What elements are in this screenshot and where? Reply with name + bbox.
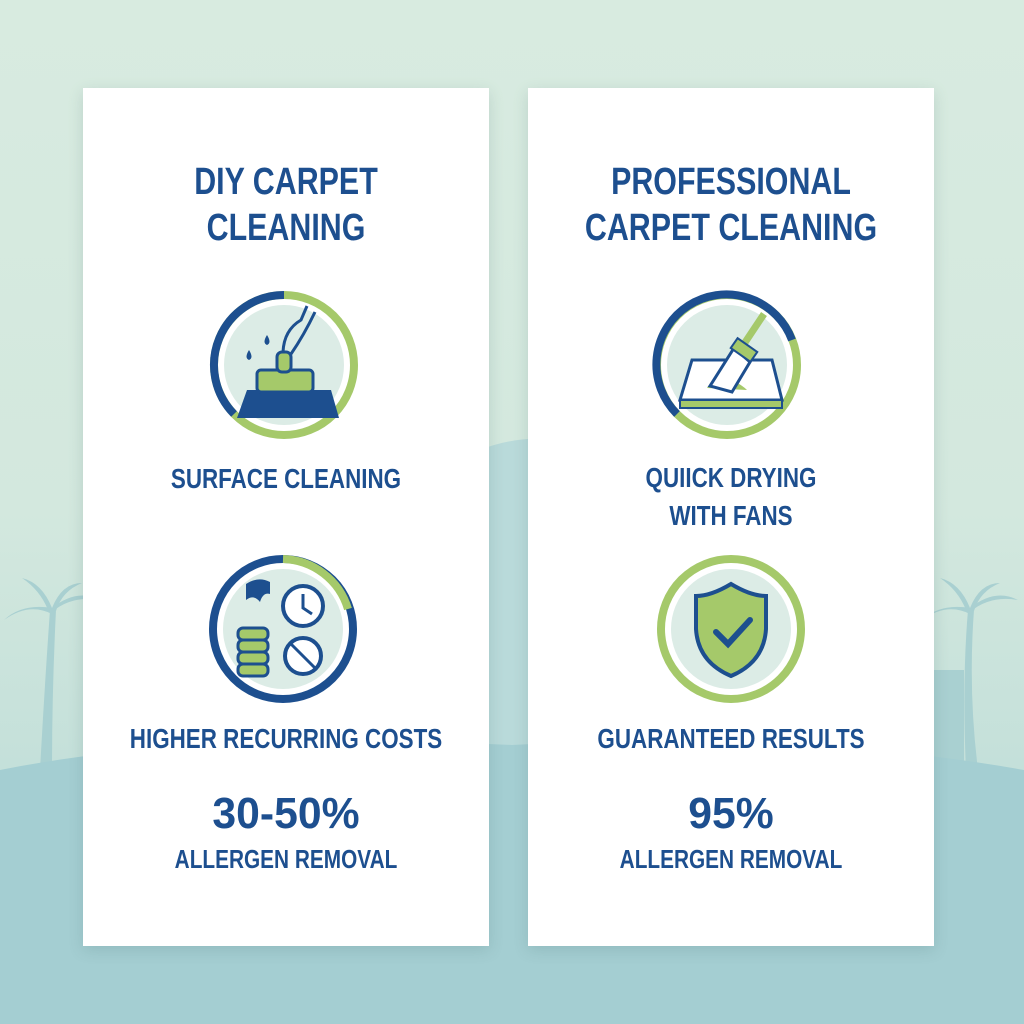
heading: professional: CARPET CLEANING <box>585 207 877 249</box>
label: quick drying <box>646 462 816 531</box>
panel: professional <box>528 88 934 946</box>
stat: 30-50%: 30-50% <box>212 789 360 838</box>
heading: DIY: CLEANING <box>207 207 365 249</box>
icon: guaranteed shield <box>657 555 805 703</box>
heading: DIY: DIY CARPET <box>194 161 378 203</box>
heading: professional: PROFESSIONAL <box>611 161 851 203</box>
stat label: ALLERGEN REMOVAL <box>620 844 842 874</box>
icon: surface cleaning <box>210 291 358 439</box>
label: surface cleaning: SURFACE CLEANING <box>171 463 401 494</box>
panel: DIY <box>83 88 489 946</box>
label: quick drying: WITH FANS <box>669 500 793 531</box>
stat: 95%: 95% <box>688 789 774 838</box>
stat label: ALLERGEN REMOVAL <box>175 844 397 874</box>
heading: professional <box>585 161 877 249</box>
icon: quick drying <box>652 290 801 439</box>
heading: DIY <box>194 161 378 249</box>
label: higher recurring costs: HIGHER RECURRING COSTS <box>130 723 442 754</box>
label: quick drying: QUIICK DRYING <box>646 462 816 493</box>
icon: recurring costs <box>209 555 357 703</box>
label: guaranteed results: GUARANTEED RESULTS <box>597 723 865 754</box>
